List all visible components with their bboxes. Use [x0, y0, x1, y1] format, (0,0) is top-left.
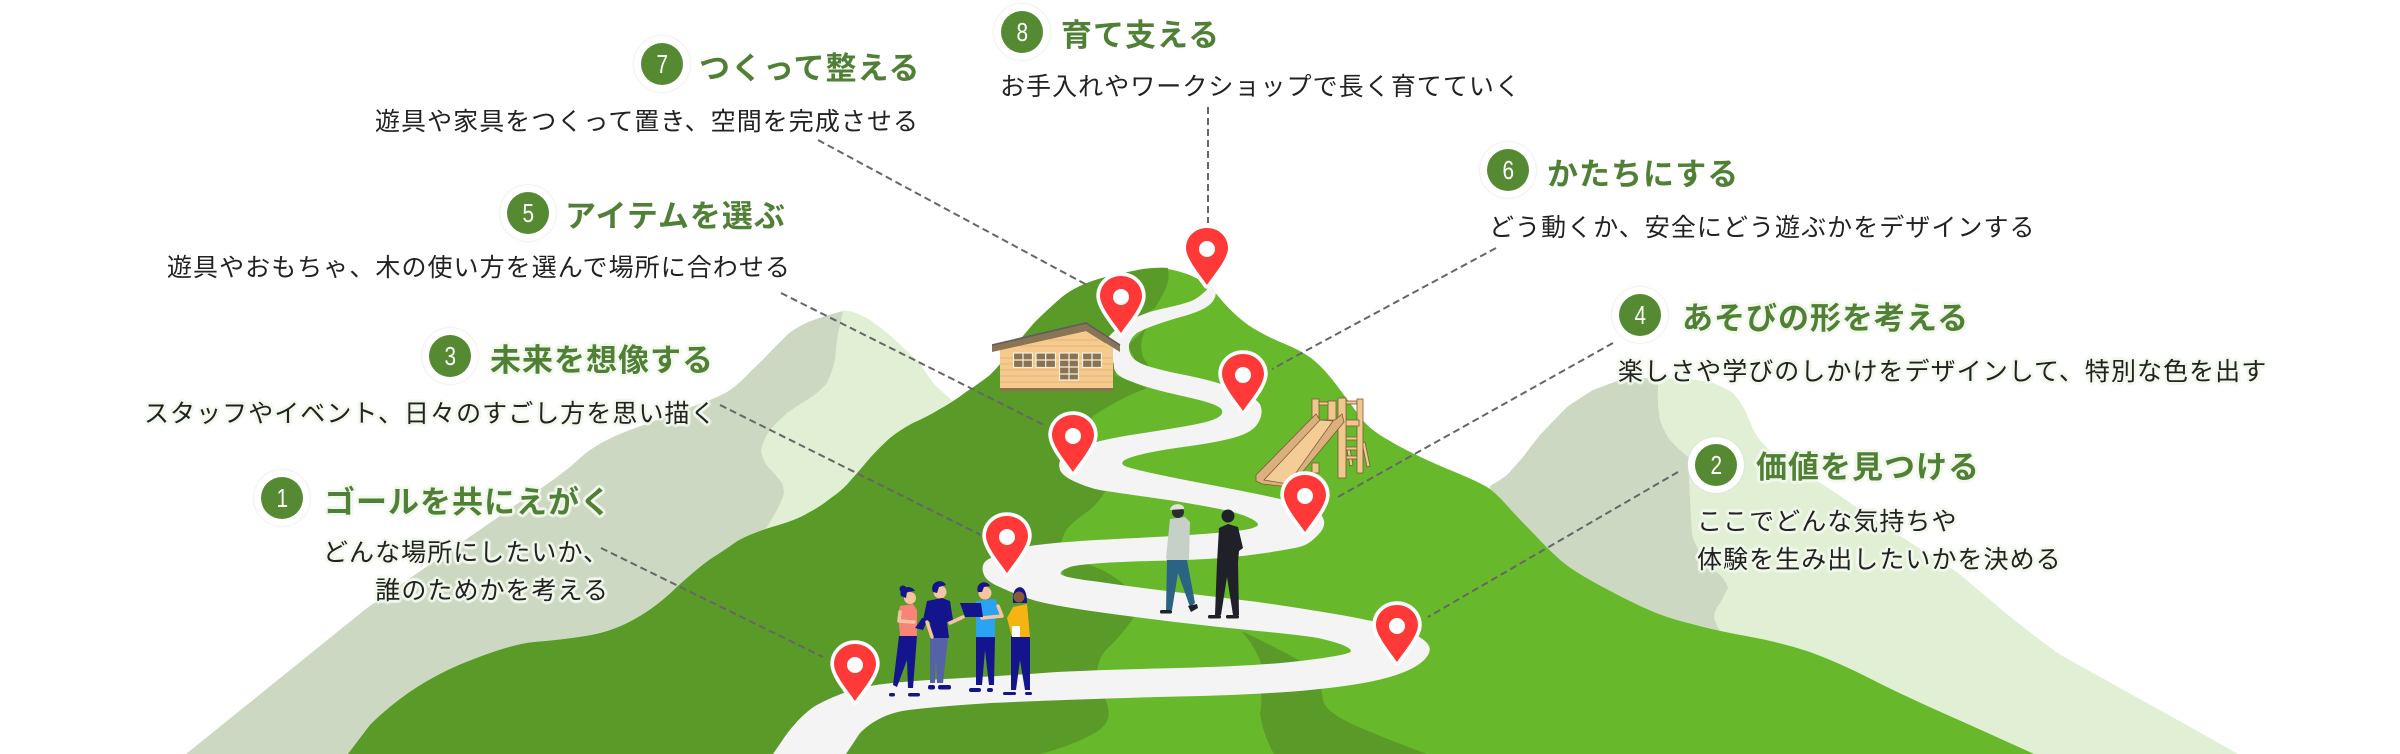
description 1: [323, 537, 609, 605]
people: suited man: [1208, 510, 1243, 618]
pin 8: [1186, 228, 1228, 285]
step 3: [144, 327, 717, 428]
heading 1: ゴールを共にえがく: [324, 484, 612, 520]
mountain: left back grey: [186, 311, 843, 754]
description 8: お手入れやワークショップで長く育てていく: [1000, 72, 1521, 100]
pin 6: [1222, 354, 1264, 411]
heading 2: 価値を見つける: [1756, 450, 1980, 485]
winding road: [773, 285, 1430, 754]
description 5: 遊具やおもちゃ、木の使い方を選んで場所に合わせる: [167, 254, 791, 282]
pin 2: [1376, 605, 1418, 662]
hill shade: triangle lower middle: [1241, 631, 1302, 666]
mountain: main hill: [348, 268, 2034, 754]
heading 3: 未来を想像する: [490, 342, 714, 378]
icon: wooden house: [992, 323, 1120, 391]
mountain: right back grey: [1490, 378, 1728, 640]
description 3: スタッフやイベント、日々のすごし方を思い描く: [144, 400, 717, 428]
step 1: [253, 469, 612, 605]
badge 5: [500, 184, 556, 240]
description 1: 誰のためかを考える: [375, 577, 609, 605]
badge 3: [422, 328, 478, 384]
mountain: right back light: [1640, 378, 2238, 754]
pin 1: [834, 644, 876, 701]
description 2: 体験を生み出したいかを決める: [1697, 546, 2062, 574]
step 4: [1611, 286, 2268, 386]
heading 4: あそびの形を考える: [1682, 300, 1969, 336]
badge 1: [254, 470, 310, 526]
pin 3: [986, 516, 1028, 573]
description 2: ここでどんな気持ちや: [1697, 508, 1958, 536]
hill shade: left dark side: [348, 268, 1169, 754]
hill shade: pocket by pin 3: [1060, 563, 1130, 590]
description 4: 楽しさや学びのしかけをデザインして、特別な色を出す: [1618, 358, 2267, 386]
hill shade: sliver by upper bend: [1128, 327, 1150, 368]
pin 5: [1052, 415, 1094, 472]
step 2: [1688, 436, 2062, 574]
heading 7: つくって整える: [699, 50, 921, 86]
step 8: [993, 3, 1521, 100]
description 6: どう動くか、安全にどう遊ぶかをデザインする: [1489, 214, 2036, 242]
people: group of four: [889, 581, 1032, 696]
hill shade: lower right patch: [1260, 688, 1427, 754]
step 5: [167, 184, 791, 282]
badge 2: 2: [1710, 450, 1722, 480]
badge 4: 4: [1634, 300, 1646, 330]
step 6: [1479, 141, 2036, 242]
badge 2: [1688, 436, 1744, 492]
pin 7: [1100, 276, 1142, 333]
badge 8: [994, 4, 1050, 60]
leader lines: [601, 107, 1678, 657]
badge 8: 8: [1016, 17, 1028, 47]
badge 5: 5: [522, 198, 534, 228]
pin 4: [1284, 475, 1326, 532]
icon: wooden slide: [1256, 398, 1370, 487]
badge 6: [1480, 142, 1536, 198]
badge 3: 3: [444, 341, 456, 371]
badge 6: 6: [1502, 155, 1514, 185]
mountain: left back light: [760, 311, 980, 560]
badge 7: [634, 36, 690, 92]
heading 8: 育て支える: [1061, 18, 1220, 52]
heading 5: アイテムを選ぶ: [565, 198, 786, 234]
badge 7: 7: [656, 49, 668, 79]
description 2: [1694, 506, 2062, 574]
badge 1: 1: [276, 483, 288, 513]
people: helmet worker: [1160, 504, 1198, 614]
description 1: どんな場所にしたいか、: [323, 539, 609, 567]
step 7: [375, 35, 921, 136]
badge 4: [1612, 286, 1668, 342]
description 7: 遊具や家具をつくって置き、空間を完成させる: [375, 108, 919, 136]
heading 6: かたちにする: [1547, 156, 1739, 192]
